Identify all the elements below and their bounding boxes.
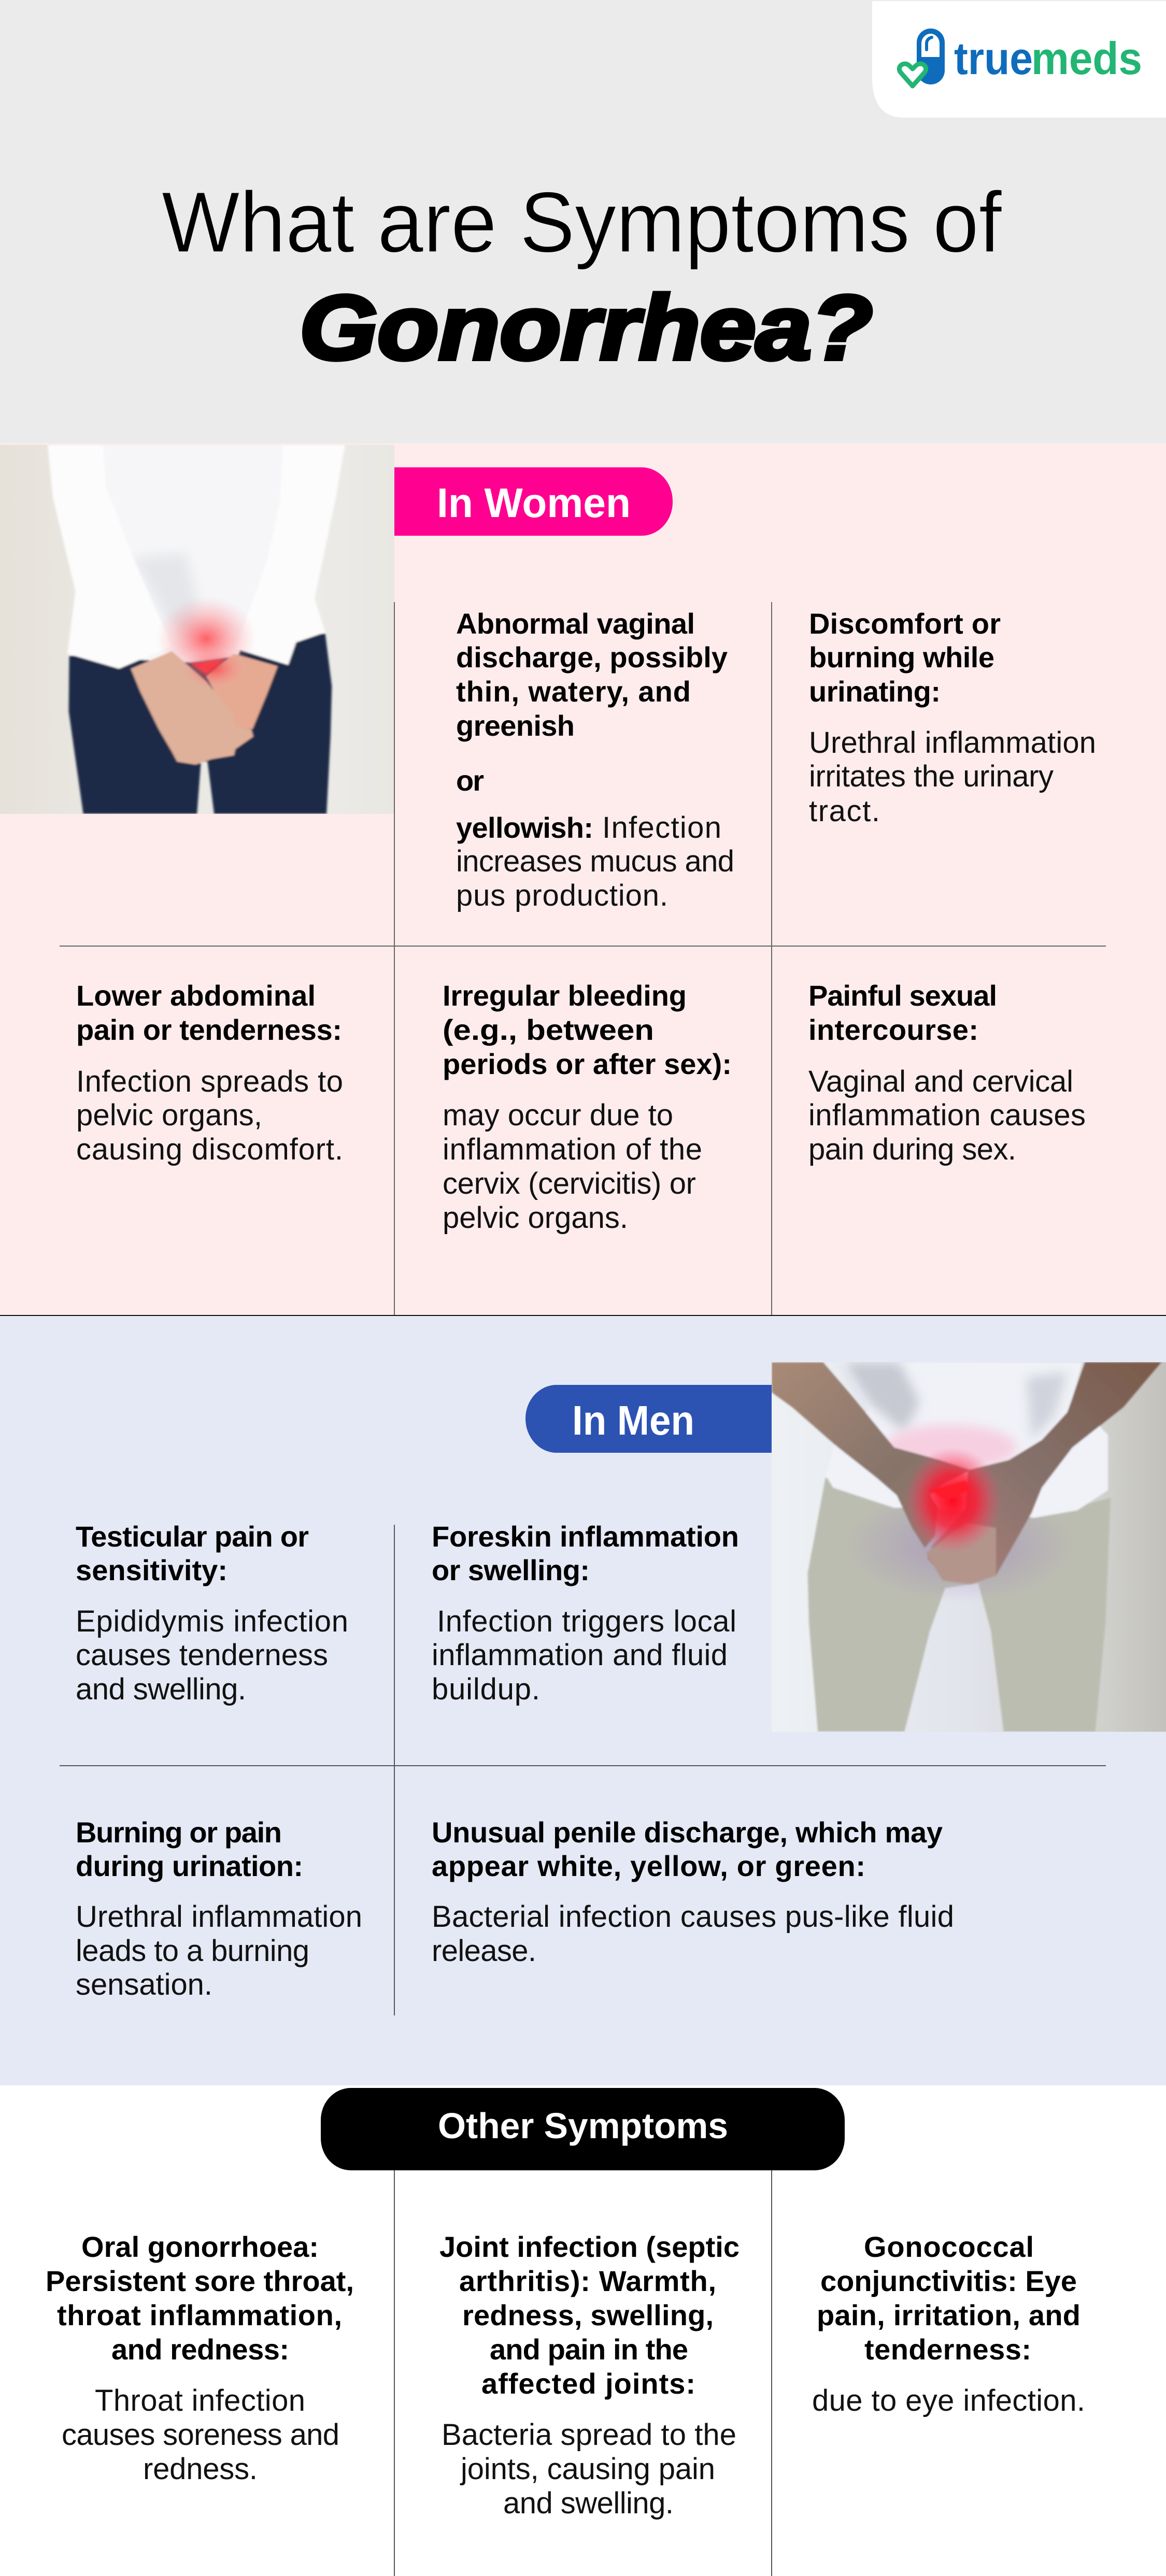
icon: capsule and heart: [899, 28, 945, 86]
symptom: gonococcal conjunctivitis: tenderness:: [864, 2333, 1031, 2366]
symptom: abnormal vaginal discharge: Abnormal vaginal: [456, 607, 695, 640]
symptom: lower abdominal pain: causing discomfort.: [76, 1133, 343, 1166]
symptom: gonococcal conjunctivitis: pain, irritation, and: [817, 2299, 1080, 2331]
symptom: oral gonorrhoea: redness.: [143, 2452, 258, 2486]
symptom: foreskin inflammation: [432, 1520, 739, 1706]
symptom: oral gonorrhoea: Throat infection: [95, 2384, 305, 2417]
badge: in men: In Men: [572, 1397, 694, 1443]
symptom: discomfort or burning: irritates the urinary: [809, 760, 1054, 793]
symptom: testicular pain: Epididymis infection: [76, 1605, 348, 1638]
symptom: painful intercourse: [808, 979, 1086, 1166]
title: Gonorrhea?: [300, 277, 873, 379]
symptom: irregular bleeding: Irregular bleeding: [443, 979, 687, 1012]
panel: other symptoms: [0, 2085, 1166, 2576]
symptom: gonococcal conjunctivitis: conjunctivitis: Eye: [820, 2265, 1077, 2297]
wordmark: true: [954, 33, 1033, 84]
symptom: oral gonorrhoea: throat inflammation,: [57, 2299, 342, 2331]
symptom: irregular bleeding: inflammation of the: [443, 1133, 702, 1166]
symptom: painful intercourse: pain during sex.: [808, 1133, 1016, 1166]
symptom: irregular bleeding: may occur due to: [443, 1098, 673, 1132]
symptom: abnormal vaginal discharge: greenish: [456, 709, 575, 742]
symptom: painful intercourse: inflammation causes: [808, 1098, 1086, 1132]
symptom: oral gonorrhoea: Oral gonorrhoea:: [81, 2230, 319, 2263]
symptom: abnormal vaginal discharge: thin, watery, and: [456, 675, 691, 708]
symptom: gonococcal conjunctivitis: due to eye infection.: [812, 2384, 1085, 2417]
wordmark: meds: [1031, 33, 1142, 84]
dividers: [60, 602, 1106, 1315]
panel: in women: [0, 443, 1166, 1315]
dividers: [394, 2170, 772, 2576]
symptom: testicular pain: [76, 1520, 348, 1706]
symptom: discomfort or burning: urinating:: [809, 675, 941, 708]
symptom: unusual penile discharge: Unusual penile discharge, which may: [432, 1816, 943, 1849]
symptom: burning during urination: Urethral inflammation: [76, 1900, 362, 1934]
symptom: foreskin inflammation: Infection triggers local: [437, 1605, 736, 1638]
symptom: burning during urination: during urination:: [76, 1850, 303, 1882]
badge: in women: [394, 467, 673, 536]
symptom: testicular pain: and swelling.: [76, 1672, 246, 1706]
panel: in men: [0, 1315, 1166, 2085]
symptom: burning during urination: [76, 1816, 362, 2001]
symptom: joint infection: Joint infection (septic: [439, 2230, 740, 2263]
badge: in men: [525, 1385, 772, 1453]
symptom: irregular bleeding: periods or after sex):: [443, 1048, 732, 1080]
symptom: abnormal vaginal discharge: yellowish:: [456, 811, 593, 844]
symptom: unusual penile discharge: appear white, yellow, or green:: [432, 1850, 865, 1882]
badge: other symptoms: Other Symptoms: [438, 2106, 728, 2146]
symptom: discomfort or burning: tract.: [809, 794, 880, 828]
photo: man holding groin: [772, 1362, 1166, 1732]
symptom: abnormal vaginal discharge: or: [456, 764, 484, 797]
symptom: abnormal vaginal discharge: [456, 607, 734, 912]
symptom: testicular pain: sensitivity:: [76, 1554, 227, 1586]
logo card: [872, 1, 1166, 118]
symptom: foreskin inflammation: or swelling:: [432, 1554, 590, 1586]
symptom: testicular pain: causes tenderness: [76, 1638, 328, 1672]
symptom: irregular bleeding: cervix (cervicitis) or: [443, 1167, 696, 1200]
symptom: unusual penile discharge: Bacterial infection causes pus-like fluid: [432, 1900, 954, 1934]
symptom: lower abdominal pain: [76, 979, 343, 1166]
symptom: irregular bleeding: [443, 979, 732, 1235]
symptom: foreskin inflammation: buildup.: [432, 1672, 540, 1706]
symptom: discomfort or burning: [809, 607, 1096, 828]
header background: [0, 0, 1166, 443]
symptom: gonococcal conjunctivitis: [812, 2230, 1085, 2417]
symptom: discomfort or burning: Urethral inflammation: [809, 726, 1096, 760]
symptom: joint infection: redness, swelling,: [462, 2299, 714, 2331]
symptom: joint infection: and pain in the: [490, 2333, 688, 2366]
symptom: joint infection: affected joints:: [481, 2367, 695, 2400]
symptom: abnormal vaginal discharge: Infection: [602, 811, 721, 845]
symptom: unusual penile discharge: release.: [432, 1934, 536, 1968]
symptom: discomfort or burning: Discomfort or: [809, 607, 1001, 640]
symptom: abnormal vaginal discharge: discharge, possibly: [456, 641, 728, 674]
symptom: burning during urination: leads to a burning: [76, 1934, 309, 1968]
symptom: oral gonorrhoea: causes soreness and: [62, 2418, 339, 2452]
symptom: foreskin inflammation: inflammation and fluid: [432, 1638, 728, 1672]
dividers: [60, 1525, 1106, 2015]
title: What are Symptoms of: [162, 175, 1002, 270]
symptom: testicular pain: Testicular pain or: [76, 1520, 309, 1553]
photo: woman holding lower abdomen: [0, 445, 394, 814]
symptom: painful intercourse: intercourse:: [808, 1013, 978, 1046]
title: [162, 175, 1002, 379]
symptom: oral gonorrhoea: Persistent sore throat,: [46, 2265, 354, 2297]
symptom: oral gonorrhoea: [46, 2230, 354, 2486]
symptom: lower abdominal pain: pain or tenderness:: [76, 1013, 342, 1046]
symptom: foreskin inflammation: Foreskin inflammation: [432, 1520, 739, 1553]
symptom: discomfort or burning: burning while: [809, 641, 994, 674]
symptom: irregular bleeding: (e.g., between: [443, 1013, 654, 1046]
symptom: joint infection: joints, causing pain: [460, 2452, 715, 2486]
symptom: abnormal vaginal discharge: pus production.: [456, 879, 668, 912]
symptom: unusual penile discharge: [432, 1816, 954, 1968]
symptom: painful intercourse: Painful sexual: [808, 979, 997, 1012]
badge: in women: In Women: [437, 480, 631, 526]
symptom: burning during urination: sensation.: [76, 1968, 212, 2001]
symptom: lower abdominal pain: pelvic organs,: [76, 1098, 262, 1132]
symptom: irregular bleeding: pelvic organs.: [443, 1201, 628, 1235]
badge: other symptoms: [321, 2088, 845, 2170]
symptom: gonococcal conjunctivitis: Gonococcal: [864, 2230, 1034, 2263]
symptom: burning during urination: Burning or pain: [76, 1816, 282, 1849]
symptom: oral gonorrhoea: and redness:: [111, 2333, 289, 2366]
symptom: joint infection: Bacteria spread to the: [442, 2418, 736, 2452]
symptom: painful intercourse: Vaginal and cervical: [808, 1065, 1073, 1098]
symptom: lower abdominal pain: Lower abdominal: [76, 979, 316, 1012]
symptom: joint infection: arthritis): Warmth,: [459, 2265, 716, 2297]
symptom: joint infection: and swelling.: [503, 2486, 674, 2520]
symptom: joint infection: [439, 2230, 740, 2520]
symptom: lower abdominal pain: Infection spreads to: [76, 1065, 343, 1098]
symptom: abnormal vaginal discharge: increases mucus and: [456, 845, 734, 878]
